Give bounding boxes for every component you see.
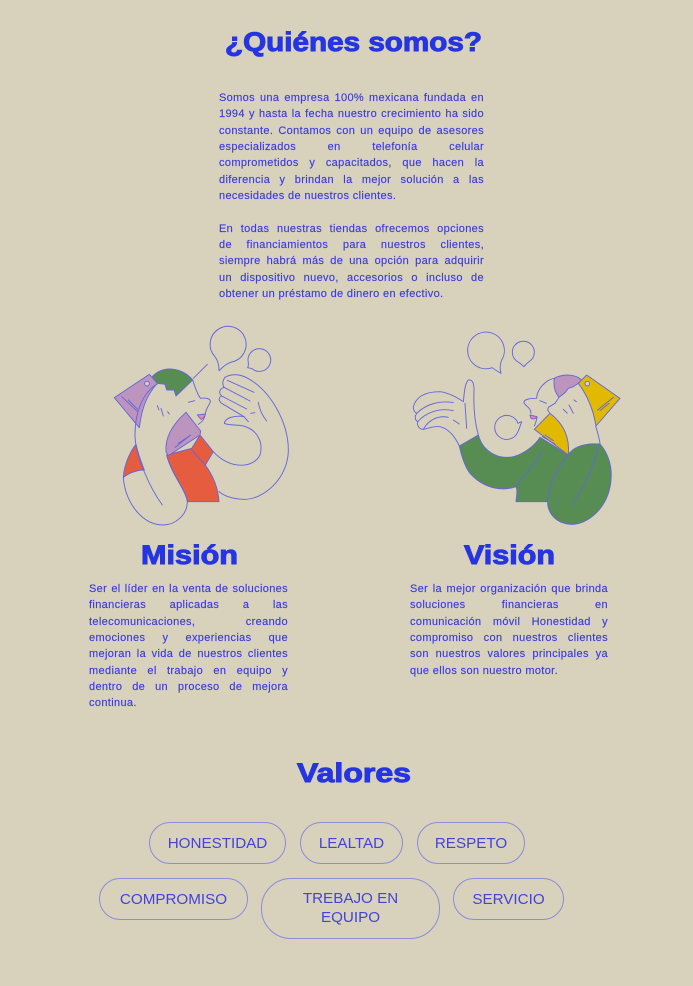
- pill: compromiso: COMPROMISO: [120, 890, 227, 908]
- text block: introduction: especializados en telefonía celular: [219, 141, 484, 153]
- text block: vision: compromiso con nuestros clientes: [410, 632, 608, 644]
- text block: introduction: Somos una empresa 100% mexicana fundada en: [219, 92, 484, 104]
- yellow phone, bottom: [534, 413, 569, 455]
- yellow phone, top: [578, 375, 620, 426]
- text block: introduction: un dispositivo nuevo, accesorios o incluso de: [219, 272, 484, 284]
- text block: mision: mediante el trabajo en equipo y: [89, 665, 288, 677]
- speech bubbles: [468, 332, 534, 439]
- green hair: [152, 369, 193, 396]
- text block: mision: telecomunicaciones, creando: [89, 616, 288, 628]
- outlines and details: [413, 378, 613, 505]
- text block: mision: emociones y experiencias que: [89, 632, 288, 644]
- green sweater: [459, 435, 611, 524]
- text block: introduction: [219, 92, 484, 300]
- text block: introduction: diferencia y brindan la mejor solución a las: [219, 174, 484, 186]
- text block: vision: que ellos son nuestro motor.: [410, 665, 558, 677]
- text block: introduction: 1994 y hasta la fecha nuestro crecimiento ha sido: [219, 108, 484, 120]
- text block: introduction: constante. Contamos con un equipo de asesores: [219, 125, 484, 137]
- text block: introduction: obtener un préstamo de dinero en efectivo.: [219, 288, 443, 300]
- text block: vision: son nuestros valores principales ya: [410, 648, 608, 660]
- pill: honestidad: [149, 822, 286, 864]
- text block: vision: Ser la mejor organización que brinda: [410, 583, 608, 595]
- text block: introduction: comprometidos y capacitados, que hacen la: [219, 157, 484, 169]
- text block: vision: comunicación móvil Honestidad y: [410, 616, 608, 628]
- text block: introduction: siempre habrá más de una opción para adquirir: [219, 255, 484, 267]
- pill: servicio: [453, 878, 564, 920]
- text block: mision: mejoran la vida de nuestros clientes: [89, 648, 288, 660]
- pill: respeto: RESPETO: [435, 834, 507, 852]
- illustration: person on phone, mission: [114, 326, 289, 526]
- text block: introduction: En todas nuestras tiendas ofrecemos opciones: [219, 223, 484, 235]
- pill: servicio: SERVICIO: [472, 890, 545, 908]
- text block: vision: [410, 583, 608, 677]
- pill: lealtad: LEALTAD: [319, 834, 384, 852]
- pill: trabajo en equipo: [261, 878, 440, 939]
- pill: respeto: [417, 822, 525, 864]
- text block: mision: dentro de un proceso de mejora: [89, 681, 288, 693]
- pill: trabajo en equipo: TREBAJO EN: [303, 890, 398, 906]
- text block: mision: [89, 583, 288, 709]
- heading: mision: Misión: [141, 540, 238, 570]
- heading: valores: Valores: [297, 758, 411, 788]
- text block: mision: Ser el líder en la venta de soluciones: [89, 583, 288, 595]
- pill: honestidad: HONESTIDAD: [168, 834, 267, 852]
- speech bubbles: [193, 326, 271, 378]
- pill: compromiso: [99, 878, 248, 920]
- pill: lealtad: [300, 822, 403, 864]
- purple phone, bottom: [166, 412, 201, 456]
- text block: mision: continua.: [89, 697, 137, 709]
- pink lips: [530, 415, 537, 419]
- text block: introduction: necesidades de nuestros clientes.: [219, 190, 396, 202]
- purple phone, top: [114, 374, 157, 428]
- orange shirt: [123, 435, 219, 502]
- text block: mision: financieras aplicadas a las: [89, 599, 288, 611]
- text block: vision: soluciones financieras en: [410, 599, 608, 611]
- pill: trabajo en equipo: EQUIPO: [321, 908, 380, 926]
- body outlines and details: [122, 375, 288, 525]
- text block: introduction: de financiamientos para nuestros clientes,: [219, 239, 484, 251]
- purple hair: [554, 375, 582, 397]
- illustration: person on phone, vision: [412, 332, 620, 525]
- pink lips: [197, 414, 205, 419]
- heading: vision: Visión: [464, 540, 555, 570]
- title: ¿Quiénes somos?: [225, 27, 482, 57]
